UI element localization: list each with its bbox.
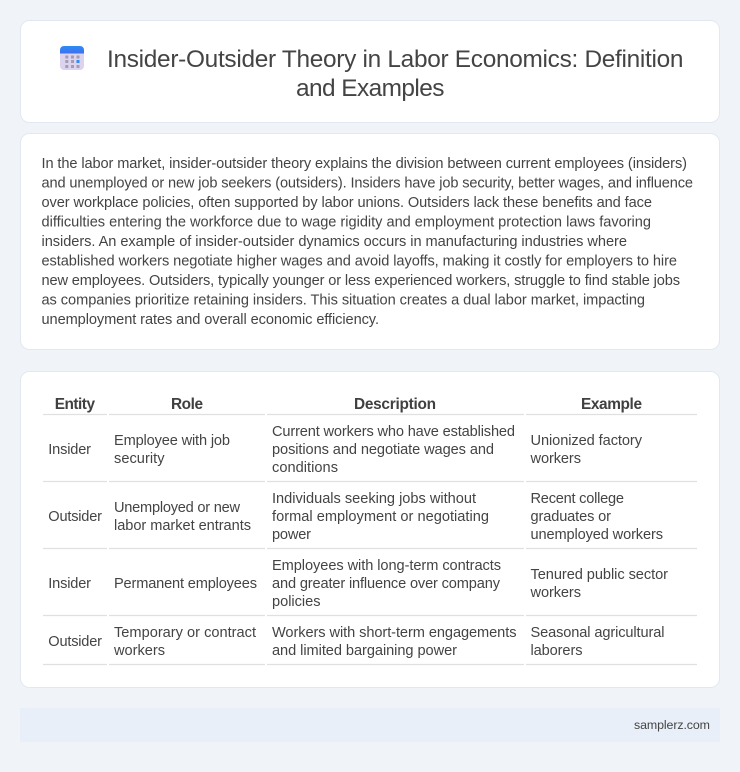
text block: introduction: difficulties entering the workforce due to wage rigidity and employment protection laws favoring [42, 214, 651, 230]
table row: insider, employee with job security: conditions [272, 460, 338, 476]
table header row: Entity [55, 396, 95, 413]
table row: outsider, temporary or contract workers: Workers with short-term engagements [272, 625, 516, 641]
table row: outsider, temporary or contract workers: Seasonal agricultural [530, 625, 664, 641]
text block: introduction: In the labor market, insider-outsider theory explains the division between current employees (insiders) [42, 156, 687, 172]
table row: outsider, unemployed or new entrants [43, 491, 697, 548]
text block: introduction: new employees. Outsiders, typically younger or less experienced workers, struggle to find stable jobs [42, 273, 680, 289]
footer text: site name: samplerz.com [634, 718, 710, 732]
table header row: Example [581, 396, 642, 413]
table row: outsider, unemployed or new entrants: Recent college [530, 491, 624, 507]
table row: insider, employee with job security [43, 424, 697, 482]
table row: outsider, temporary or contract workers [43, 625, 697, 664]
table row: insider, permanent employees [43, 558, 697, 616]
table row: outsider, temporary or contract workers: Outsider [48, 634, 102, 650]
text block: introduction [42, 156, 693, 328]
table row: outsider, unemployed or new entrants: unemployed workers [530, 527, 663, 543]
table row: insider, employee with job security: security [114, 451, 165, 467]
table header row: Role [171, 396, 203, 413]
text block: introduction: insiders. An example of insider-outsider dynamics occurs in manufacturing industries where [42, 234, 627, 250]
table row: insider, permanent employees: workers [530, 585, 581, 601]
table row: insider, employee with job security: workers [530, 451, 581, 467]
table row: outsider, temporary or contract workers: Temporary or contract [114, 625, 256, 641]
panel: introduction text card [20, 134, 720, 350]
table row: insider, employee with job security: Unionized factory [530, 433, 643, 449]
table row: insider, employee with job security: Current workers who have established [272, 424, 515, 440]
text block: introduction: established workers negotiate higher wages and avoid layoffs, making it costly for employers to hire [42, 254, 677, 270]
table row: outsider, unemployed or new entrants: formal employment or negotiating [272, 509, 489, 525]
table row: outsider, unemployed or new entrants: Outsider [48, 509, 102, 525]
table row: insider, permanent employees: Insider [48, 576, 91, 592]
panel: header card [20, 20, 720, 122]
table row: outsider, temporary or contract workers: and limited bargaining power [272, 643, 457, 659]
table row: insider, permanent employees: and greater influence over company [272, 576, 501, 592]
title: and Examples [296, 75, 444, 102]
table row: insider, permanent employees: policies [272, 594, 320, 610]
text block: introduction: over workplace policies, often supported by labor unions. Outsiders lack these benefits and face [42, 195, 652, 211]
title: Insider-Outsider Theory in Labor Economics: Definition [107, 46, 684, 73]
table row: insider, permanent employees: Permanent employees [114, 576, 257, 592]
title [107, 46, 684, 102]
footer bar [20, 708, 720, 742]
text block: introduction: unemployment rates and overall economic efficiency. [42, 312, 379, 328]
table row: insider, permanent employees: Tenured public sector [530, 567, 668, 583]
table row: insider, employee with job security: positions and negotiate wages and [272, 442, 494, 458]
panel: comparison table card [20, 372, 720, 688]
table row: outsider, unemployed or new entrants: Individuals seeking jobs without [272, 491, 476, 507]
text block: introduction: and unemployed or new job seekers (outsiders). Insiders have job security, better wages, and influence [42, 176, 693, 192]
table row: insider, employee with job security: Insider [48, 442, 91, 458]
table row: outsider, temporary or contract workers: workers [113, 643, 165, 659]
table header row [43, 396, 697, 414]
table row: insider, employee with job security: Employee with job [114, 433, 230, 449]
table row: insider, permanent employees: Employees with long-term contracts [272, 558, 501, 574]
text block: introduction: as companies prioritize retaining insiders. This situation creates a dual labor market, impacting [42, 292, 645, 308]
table row: outsider, unemployed or new entrants: labor market entrants [114, 518, 251, 534]
table row: outsider, unemployed or new entrants: Unemployed or new [114, 500, 240, 516]
table row: outsider, unemployed or new entrants: graduates or [530, 509, 611, 525]
table header row: Description [354, 396, 436, 413]
table row: outsider, temporary or contract workers: laborers [530, 643, 582, 659]
icon: calendar [60, 46, 84, 70]
table row: outsider, unemployed or new entrants: power [272, 527, 311, 543]
